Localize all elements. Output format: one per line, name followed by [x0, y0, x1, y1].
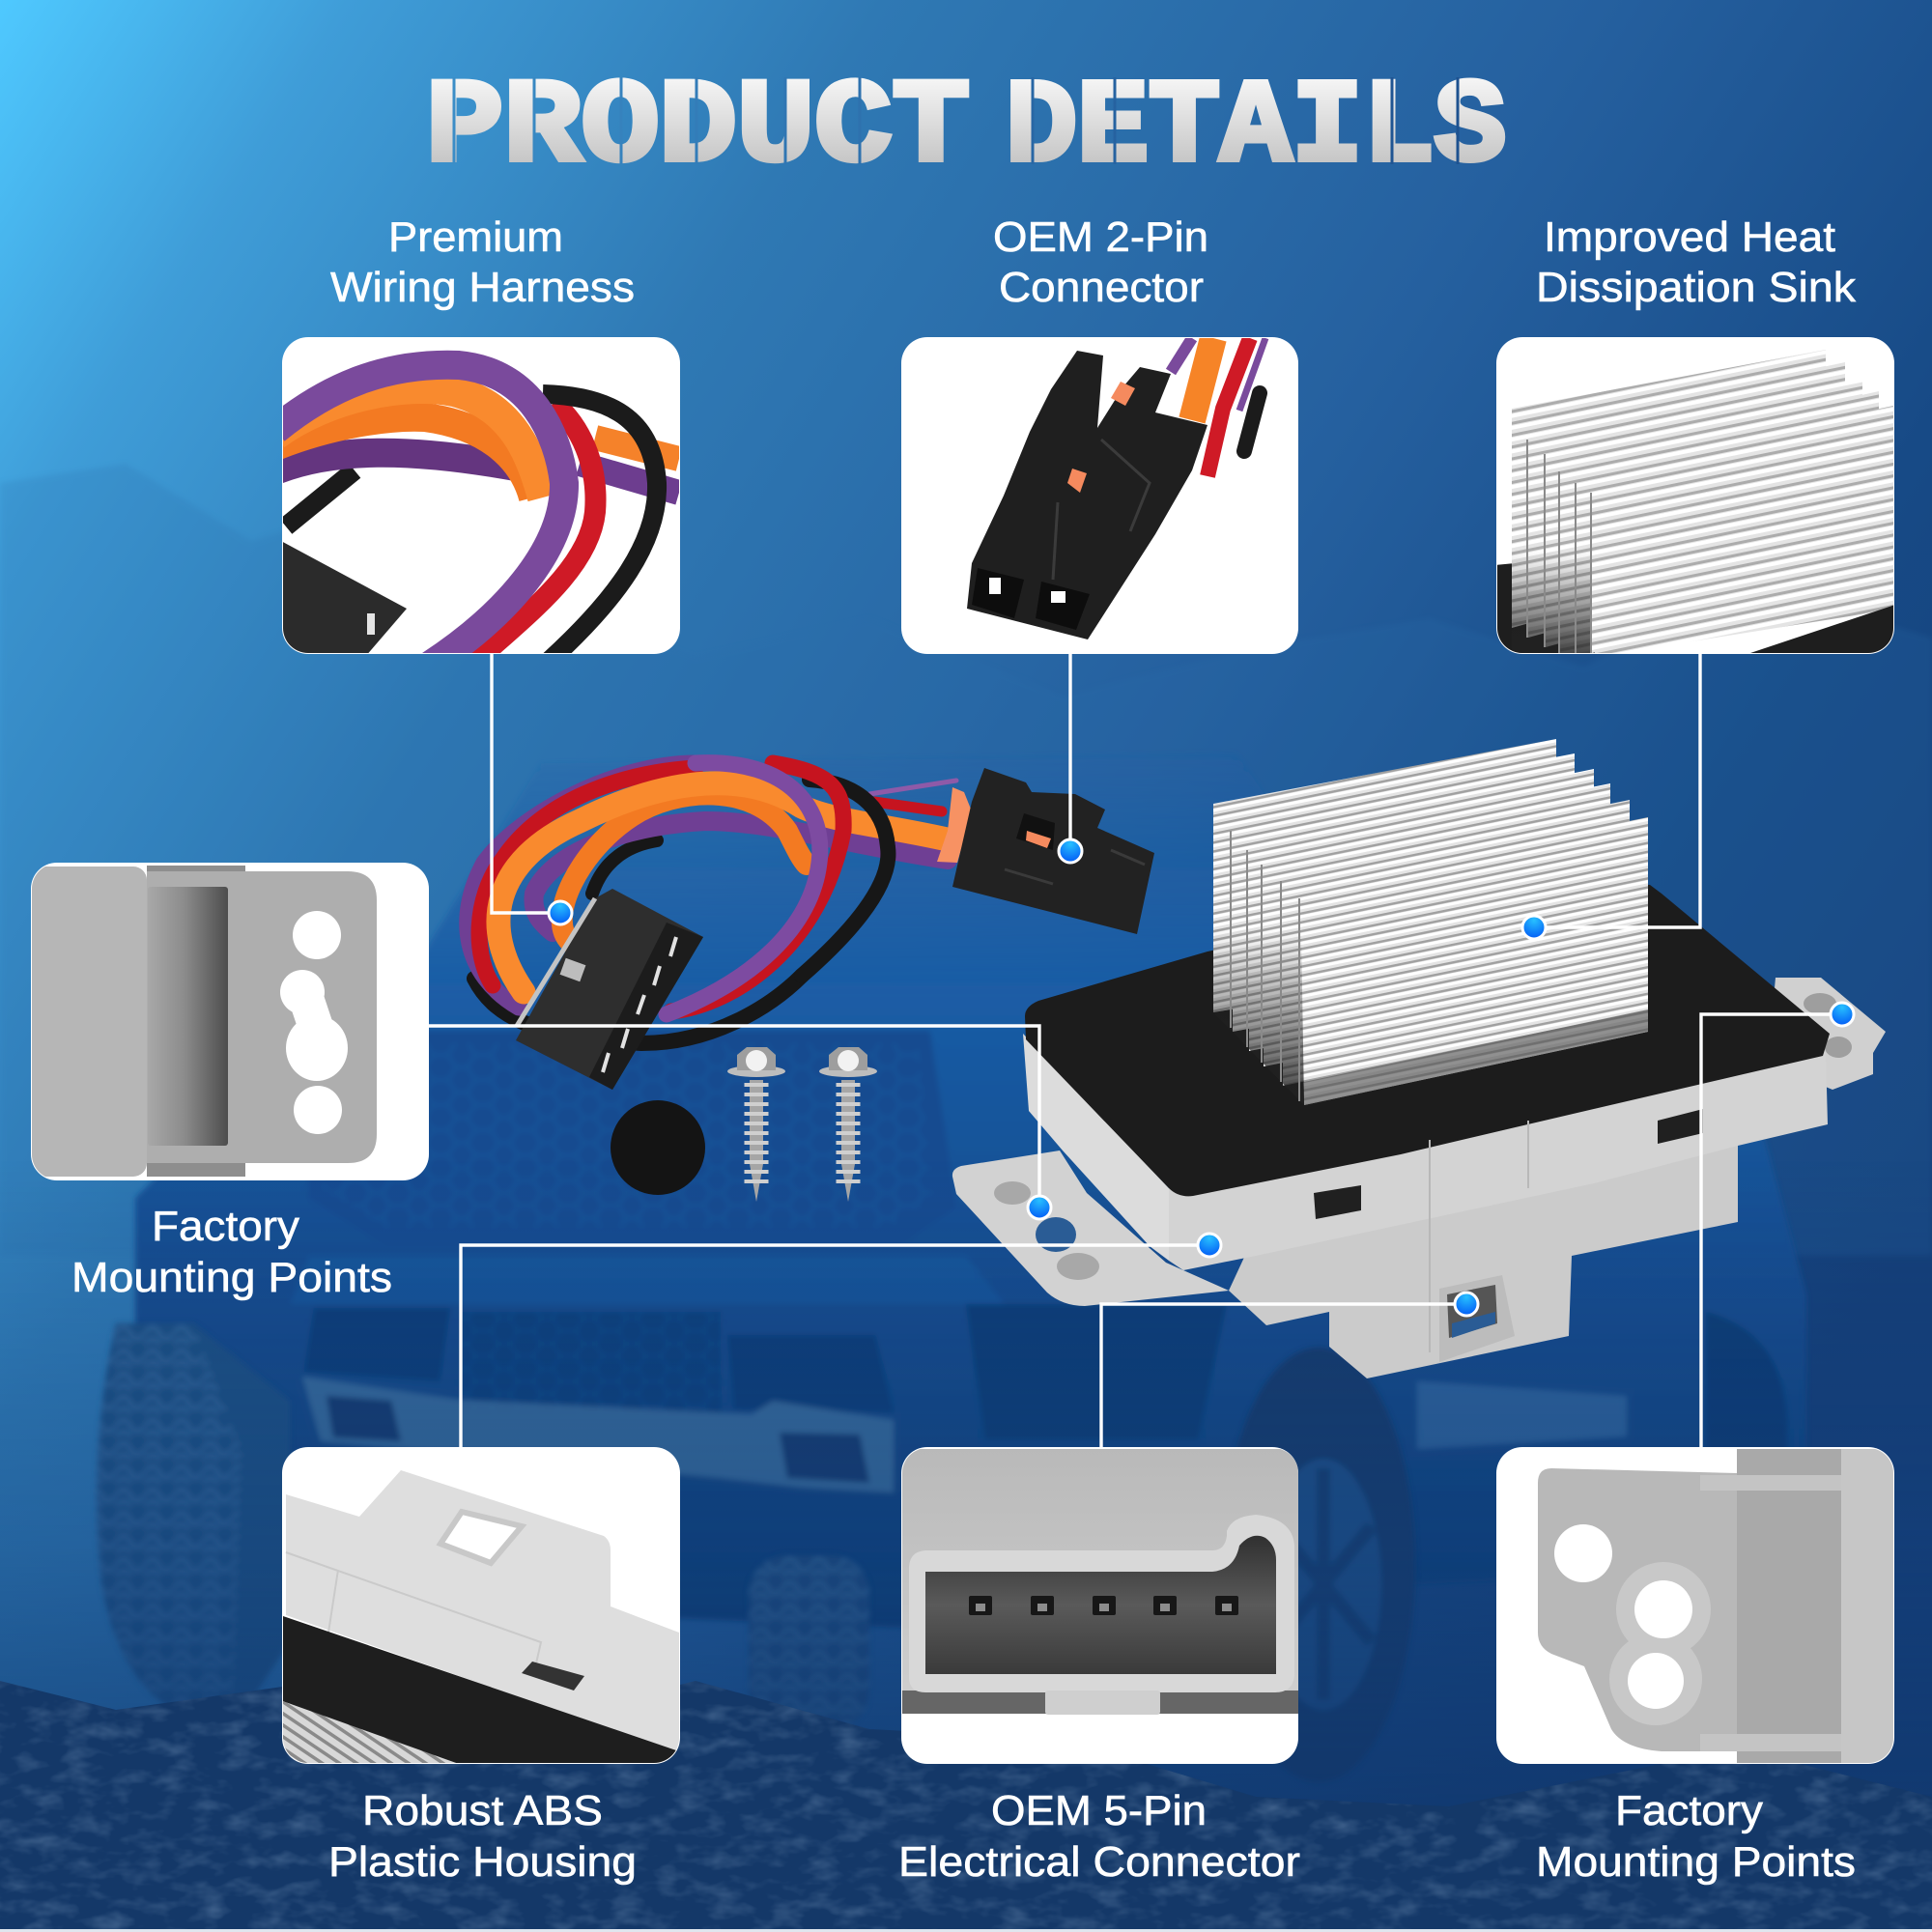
purple wire right: [667, 763, 820, 1014]
panel: right mounting points: [1496, 1447, 1895, 1764]
pin contacts: [976, 1604, 1232, 1611]
holes: [1554, 1524, 1711, 1725]
slot: [148, 887, 228, 1146]
right flange: [1768, 978, 1886, 1090]
flange plate: [147, 871, 377, 1163]
foam disc: [611, 1100, 705, 1195]
title: [426, 61, 1506, 195]
black wire: [543, 394, 657, 667]
fins: [280, 1700, 459, 1768]
label: robust ABS plastic housing: Robust ABS: [362, 1787, 603, 1834]
flange: [1538, 1468, 1737, 1751]
rear edge band: [147, 866, 245, 1177]
orange wire 1: [498, 783, 952, 992]
2-pin connector: [952, 768, 1154, 934]
label: factory mounting points left: Factory: [152, 1203, 299, 1250]
background truck silhouette: [135, 753, 1806, 1642]
holes: [280, 911, 348, 1134]
callout line and dot: right mounting point: [1701, 1003, 1854, 1447]
label: improved heat dissipation sink: [1536, 213, 1857, 311]
label: OEM 2-pin connector: Connector: [999, 264, 1204, 311]
title: PRODUCT: [426, 61, 970, 195]
purple right wire: [580, 464, 679, 493]
callout line and dot: heat sink: [1522, 654, 1700, 939]
purple lower band: [275, 453, 541, 471]
window: [440, 1512, 522, 1563]
lower bar: [1700, 1734, 1841, 1751]
label: factory mounting points right: Factory: [1615, 1787, 1763, 1834]
connector rim: [909, 1515, 1294, 1692]
heat sink fins: [1213, 739, 1648, 1105]
label: premium wiring harness: [330, 213, 635, 311]
left housing block: [29, 867, 147, 1177]
connector clip: [1439, 1275, 1515, 1362]
black inner wire: [592, 840, 657, 894]
tab: [1045, 1690, 1160, 1715]
connector body: [967, 351, 1208, 639]
callout line and dot: ABS housing: [461, 1234, 1221, 1447]
orange right wire: [595, 438, 679, 459]
label: factory mounting points left: [71, 1203, 392, 1301]
panel: wiring harness: [275, 337, 680, 667]
black base corner: [1750, 605, 1893, 653]
label: OEM 2-pin connector: [993, 213, 1208, 311]
callout line and dot: wiring harness: [492, 654, 572, 924]
red left arc: [479, 768, 696, 985]
black base: [1497, 563, 1595, 653]
upper bar: [1700, 1475, 1841, 1491]
8-way harness connector: [516, 889, 703, 1090]
right flange holes: [1804, 993, 1852, 1058]
title: DETAILS: [1006, 61, 1506, 195]
lower housing: [1229, 1121, 1738, 1378]
label: premium wiring harness: Wiring Harness: [330, 264, 635, 311]
callout line and dot: 5-pin connector: [1101, 1293, 1478, 1447]
panel: ABS housing: [280, 1447, 680, 1768]
orange wire 2: [562, 794, 807, 942]
slot: [522, 1662, 584, 1690]
fins: [1512, 350, 1826, 628]
foam band: [280, 1615, 676, 1768]
orange collar: [937, 787, 972, 863]
label: robust ABS plastic housing: [328, 1787, 637, 1886]
label: premium wiring harness: Premium: [388, 213, 563, 261]
stub wires: [874, 802, 942, 811]
creases: [286, 1552, 541, 1663]
background tires: [97, 1323, 1415, 1782]
pins: [969, 1596, 1238, 1615]
label: improved heat dissipation sink: Dissipation Sink: [1536, 264, 1857, 311]
screw right: [819, 1047, 877, 1202]
orange upper: [275, 388, 543, 497]
purple arc: [275, 365, 564, 667]
left flange: [952, 1151, 1229, 1306]
mounting screws: [727, 1047, 877, 1202]
wire bundle: [1171, 338, 1265, 476]
label: OEM 5-pin electrical connector: Electrical Connector: [898, 1838, 1300, 1886]
purple inner wire: [533, 821, 948, 932]
main product: wire harness with connectors: [468, 763, 956, 1043]
panel: left mounting points: [29, 863, 429, 1180]
right cap: [1841, 1449, 1895, 1763]
label: OEM 5-pin electrical connector: [898, 1787, 1300, 1886]
black wire left and bottom: [474, 976, 802, 1043]
label: factory mounting points left: Mounting Points: [71, 1254, 392, 1301]
red wire right: [671, 763, 843, 1011]
label: OEM 2-pin connector: OEM 2-Pin: [993, 213, 1208, 261]
panel: 5-pin connector: [898, 1447, 1300, 1764]
panel: 2-pin connector: [901, 337, 1298, 654]
main product: blower resistor: [952, 739, 1886, 1378]
flange holes: [994, 1181, 1099, 1280]
rear column: [1737, 1449, 1843, 1763]
rocky ground: [0, 1681, 1932, 1932]
orange lower: [275, 417, 533, 497]
red wire: [469, 403, 596, 667]
black lower wire: [286, 470, 355, 526]
label: OEM 5-pin electrical connector: OEM 5-Pin: [991, 1787, 1207, 1834]
housing front face: [1169, 1053, 1828, 1270]
small connector: [281, 541, 407, 657]
panel: heat sink: [1495, 337, 1898, 657]
housing: [286, 1470, 679, 1753]
callout line and dot: left mounting point: [429, 1026, 1051, 1219]
housing upper: [898, 1449, 1300, 1713]
label: robust ABS plastic housing: Plastic Housing: [328, 1838, 637, 1886]
cavity: [925, 1536, 1276, 1674]
black wire right: [802, 780, 888, 976]
screw left: [727, 1047, 785, 1202]
housing slots: [1314, 1109, 1703, 1219]
housing left face: [1023, 1034, 1169, 1261]
foam top: [1025, 879, 1830, 1196]
label: improved heat dissipation sink: Improved Heat: [1544, 213, 1835, 261]
label: factory mounting points right: [1536, 1787, 1856, 1886]
lower band: [898, 1690, 1300, 1714]
label: factory mounting points right: Mounting Points: [1536, 1838, 1856, 1886]
callout line and dot: 2-pin connector: [1059, 654, 1082, 863]
purple lower arc: [468, 763, 696, 1008]
